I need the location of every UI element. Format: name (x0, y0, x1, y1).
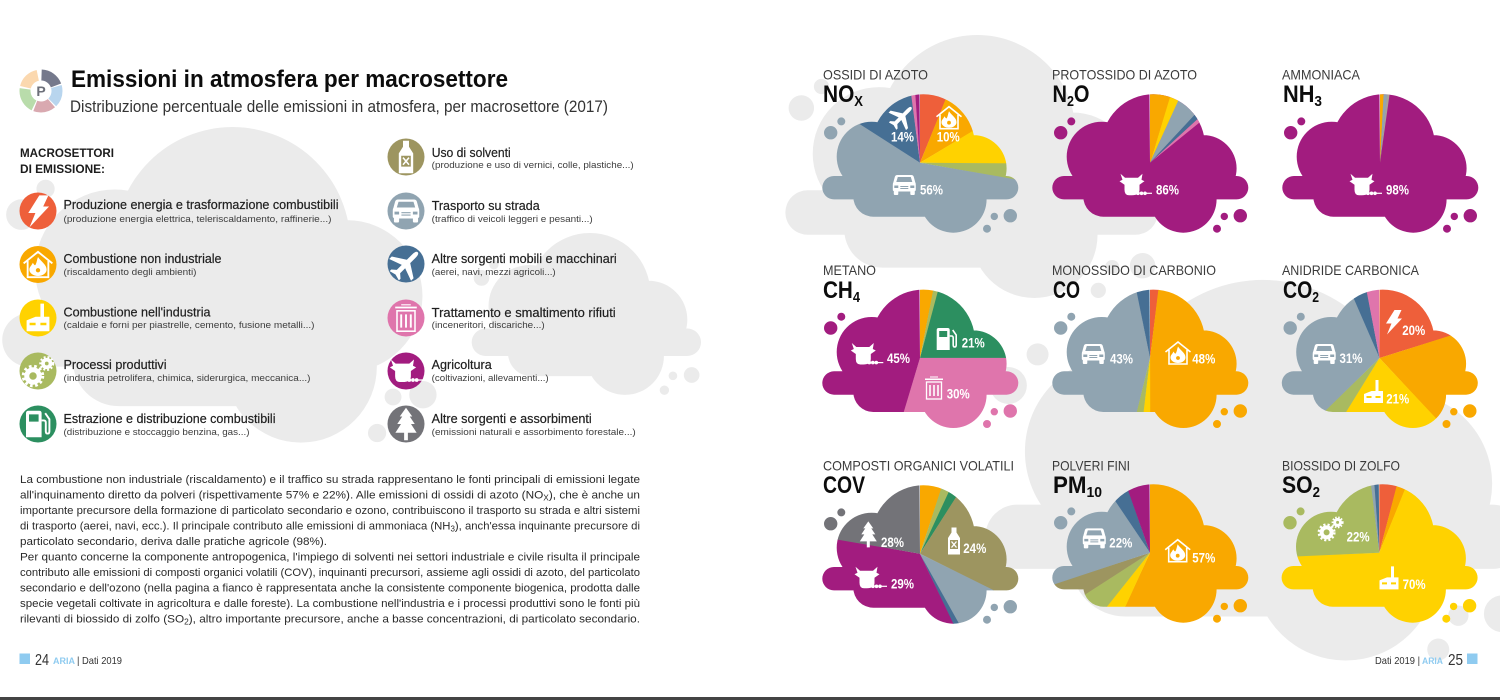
legend item: Trasporto su strada (388, 192, 593, 230)
footer: right page: ARIA (1422, 656, 1443, 667)
legend heading: DI EMISSIONE: (20, 162, 105, 176)
background cloud: right page top (785, 35, 1158, 298)
footer: right page: 25 (1448, 652, 1463, 669)
legend item: Uso di solventi (388, 138, 634, 176)
body text: ), che è anche un (549, 490, 640, 502)
chart: CO2: ANIDRIDE CARBONICA (1282, 262, 1420, 278)
legend item: Estrazione e distribuzione: Estrazione e distribuzione combustibili (64, 412, 276, 426)
chart: CO2: 20% (1402, 323, 1425, 338)
legend item: Uso di solventi: (produzione e uso di vernici, colle, plastiche...) (432, 160, 634, 171)
chart: CH4: 4 (853, 289, 861, 306)
legend item: Uso di solventi: Uso di solventi (432, 146, 511, 160)
body text: 2 (184, 618, 189, 626)
chart: SO2: BIOSSIDO DI ZOLFO (1282, 458, 1400, 474)
legend item: Altre sorgenti e assorbimenti (388, 406, 636, 442)
chart: CH4: 21% (962, 336, 985, 350)
legend item: Combustione non industriale: (riscaldamento degli ambienti) (64, 267, 196, 278)
chart: PM10: PM (1053, 472, 1089, 499)
chart: SO2: 2 (1313, 484, 1320, 501)
legend item: Produzione energia: Produzione energia e trasformazione combustibili (64, 198, 338, 212)
chart: CH4: 45% (887, 351, 910, 366)
chart: N2O: 86% (1156, 182, 1179, 197)
chart: COV: COMPOSTI ORGANICI VOLATILI (823, 458, 1014, 474)
legend item: Trasporto su strada: Trasporto su strada (432, 199, 540, 213)
legend item: Combustione nell'industria: Combustione nell'industria (64, 306, 211, 320)
chart: COV: COV (823, 472, 865, 499)
legend item: Altre sorgenti e assorbimenti: Altre sorgenti e assorbimenti (432, 412, 592, 426)
footer: left page: 24 (35, 652, 49, 669)
legend item: Processi produttivi: (industria petrolifera, chimica, siderurgica, meccanica...) (64, 373, 310, 384)
legend item: Trattamento rifiuti (388, 300, 616, 336)
legend: left column (20, 192, 338, 442)
chart: COV (823, 458, 1014, 629)
chart: PM10: 22% (1109, 536, 1132, 551)
chart: NH3: 3 (1314, 93, 1322, 110)
legend item: Combustione non industriale: Combustione non industriale (64, 252, 222, 266)
body text (20, 474, 640, 626)
chart: PM10: 10 (1086, 484, 1102, 501)
chart: CH4: CH (823, 277, 858, 304)
chart: N2O (1052, 66, 1225, 238)
legend item: Trattamento rifiuti: Trattamento e smaltimento rifiuti (432, 306, 616, 320)
legend item: Produzione energia (20, 192, 338, 230)
legend item: Estrazione e distribuzione (20, 406, 276, 442)
chart: N2O: N (1052, 81, 1070, 108)
footer: left page: | Dati 2019 (77, 655, 122, 667)
legend item: Altre sorgenti e assorbimenti: (emissioni naturali e assorbimento forestale...) (432, 427, 636, 438)
background cloud: right page bottom (985, 280, 1500, 660)
footer: left page: ARIA (53, 656, 75, 667)
chart: COV: 29% (891, 576, 914, 591)
chart: PM10: POLVERI FINI (1052, 458, 1130, 474)
chart: CO: CO (1053, 277, 1080, 304)
chart: CO: MONOSSIDO DI CARBONIO (1052, 262, 1216, 278)
chart: CO: 43% (1110, 352, 1133, 366)
chart: NOx: X (854, 93, 863, 110)
chart: CO2: CO (1283, 277, 1319, 304)
body text: 3 (450, 524, 455, 534)
legend heading: MACROSETTORI (20, 146, 114, 160)
chart: NOx: OSSIDI DI AZOTO (823, 66, 928, 82)
body text: contributo alle emissioni di composti organici volatili (COV), inquinanti precursori, assieme agli ossidi di azoto, del particolato (20, 567, 640, 579)
body text: all'inquinamento diretto da polveri (rispettivamente 57% e 22%). Alle emissioni di ossidi di azoto (NO (20, 490, 521, 502)
body text: ), anch'essa inquinante precursore di (455, 520, 640, 532)
chart: N2O: PROTOSSIDO DI AZOTO (1052, 66, 1197, 82)
legend item: Agricoltura (388, 352, 549, 390)
body text: La combustione non industriale (riscaldamento) e il traffico su strada rappresentano le fonti principali di emissioni legate (20, 474, 640, 486)
footer: right page (1375, 652, 1478, 669)
chart: CO (1052, 262, 1225, 433)
title: Emissioni in atmosfera per macrosettore (71, 66, 508, 93)
chart: SO2: 70% (1403, 577, 1426, 592)
chart: N2O: O (1074, 81, 1090, 108)
chart: NOx: 56% (920, 182, 943, 197)
chart: NOx: NO (823, 81, 859, 108)
body text: Per quanto concerne la componente antropogenica, l'impiego di solventi nei settori industriale e civile risulta il principale (20, 552, 640, 564)
legend item: Processi produttivi: Processi produttivi (64, 358, 166, 372)
chart: PM10 (1052, 458, 1225, 628)
icon: P logo: P (36, 83, 46, 99)
chart: SO2: 22% (1347, 530, 1370, 545)
chart: CO2: 21% (1386, 392, 1409, 407)
body text: importante precursore della formazione di particolato secondario e ozono, contribuiscono il trasporto su strada e altri sistemi (20, 505, 640, 517)
legend heading (20, 146, 114, 176)
chart: CH4: 30% (947, 386, 970, 401)
body text: particolato secondario, deriva dalle pratiche agricole (98%). (20, 536, 327, 548)
legend item: Combustione nell'industria: (caldaie e forni per piastrelle, cemento, fusione metalli...) (64, 320, 314, 331)
legend item: Agricoltura: Agricoltura (432, 358, 492, 372)
legend item: Processi produttivi (20, 352, 310, 390)
chart: COV: 28% (881, 535, 904, 550)
chart: NH3: NH (1283, 81, 1318, 108)
subtitle: Distribuzione percentuale delle emissioni in atmosfera, per macrosettore (2017) (70, 98, 608, 116)
legend item: Altre sorgenti mobili: Altre sorgenti mobili e macchinari (432, 252, 617, 266)
chart: SO2 (1282, 458, 1454, 628)
body text: ), altro importante precursore, anche a basse concentrazioni, di particolato secondario. (189, 614, 640, 626)
chart: NH3 (1282, 66, 1455, 238)
chart: COV: 24% (963, 541, 986, 556)
chart: NOx: 14% (891, 130, 914, 145)
legend item: Combustione non industriale (20, 246, 222, 283)
legend item: Altre sorgenti mobili: (aerei, navi, mezzi agricoli...) (432, 267, 556, 278)
body text: di trasporto (aerei, navi, ecc.). Il principale contributo alle emissioni di ammoniaca (NH (20, 520, 450, 532)
chart: CO2: 2 (1312, 289, 1319, 306)
footer: left page (20, 652, 122, 669)
chart: SO2: SO (1282, 472, 1317, 499)
legend item: Altre sorgenti mobili (383, 241, 617, 287)
legend item: Trattamento rifiuti: (inceneritori, discariche...) (432, 320, 545, 331)
body text: specie vegetali coltivate in agricoltura e dalle foreste). La combustione nell'industria e i processi produttivi sono le fonti più (20, 598, 640, 610)
body text: secondario e dell'ozono (nella pagina a fianco è rappresentata anche la consistente componente biogenica, prodotta dalle (20, 582, 640, 594)
chart: CO2 (1282, 262, 1454, 433)
chart: NH3: AMMONIACA (1282, 66, 1361, 82)
chart: CH4: METANO (823, 262, 876, 278)
body text: rilevanti di biossido di zolfo (SO (20, 614, 178, 626)
chart: CO2: 31% (1340, 351, 1362, 366)
chart: NH3: 98% (1386, 182, 1409, 197)
chart: PM10: 57% (1192, 550, 1215, 565)
icon: P logo (25, 75, 57, 107)
legend item: Produzione energia: (produzione energia elettrica, teleriscaldamento, raffinerie...) (64, 214, 332, 225)
legend item: Estrazione e distribuzione: (distribuzione e stoccaggio benzina, gas...) (64, 427, 250, 438)
chart: CH4 (823, 262, 995, 433)
legend: right column (383, 138, 636, 442)
body text: X (543, 494, 550, 502)
background cloud: left page small (472, 233, 701, 395)
bottom bar (0, 697, 1500, 700)
legend item: Combustione nell'industria (20, 300, 314, 336)
chart: NOx (823, 66, 995, 238)
chart: CO: 48% (1192, 352, 1215, 366)
chart: NOx: 10% (937, 130, 960, 145)
chart: N2O: 2 (1067, 93, 1074, 110)
footer: right page: Dati 2019 | (1375, 655, 1420, 667)
legend item: Trasporto su strada: (traffico di veicoli leggeri e pesanti...) (432, 214, 593, 225)
legend item: Agricoltura: (coltivazioni, allevamenti...) (432, 373, 549, 384)
background cloud: left page large (2, 127, 437, 443)
